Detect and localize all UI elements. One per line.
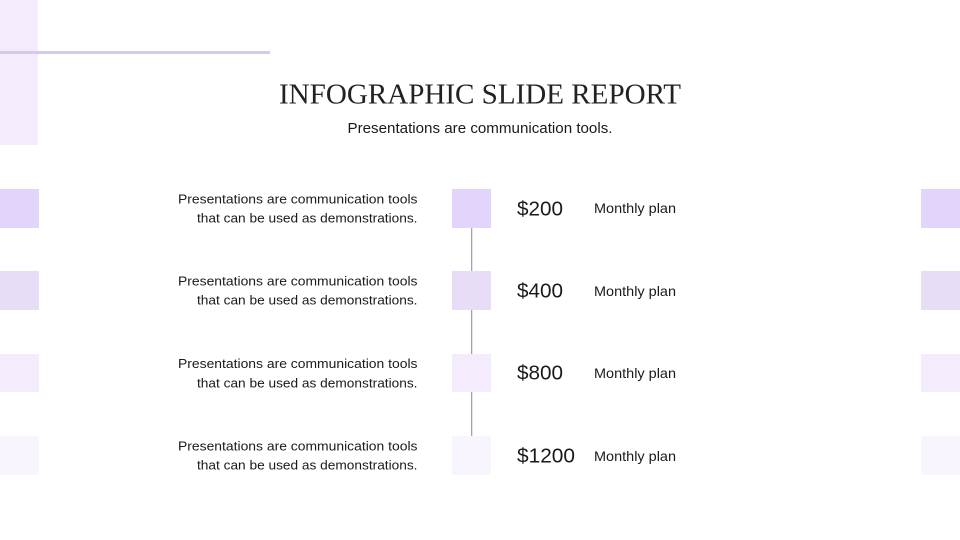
row 1 price: $200 bbox=[517, 198, 563, 220]
row 2 description: that can be used as demonstrations. bbox=[197, 292, 418, 308]
timeline connectors bbox=[471, 228, 472, 436]
row 1 bbox=[178, 189, 676, 228]
row 4 description: that can be used as demonstrations. bbox=[197, 458, 418, 472]
row 4 marker bbox=[452, 436, 491, 475]
row 2 description bbox=[178, 274, 418, 308]
row 4 description bbox=[178, 438, 418, 472]
row 1 marker bbox=[452, 189, 491, 228]
row 1 plan: Monthly plan bbox=[594, 200, 676, 216]
row 2 bbox=[178, 271, 676, 310]
row 1 description: Presentations are communication tools bbox=[178, 192, 418, 206]
top-left accent line bbox=[0, 51, 270, 54]
row 2 description: Presentations are communication tools bbox=[178, 274, 418, 288]
row 1 description: that can be used as demonstrations. bbox=[197, 210, 418, 226]
right edge squares bbox=[921, 189, 960, 475]
row 1 description bbox=[178, 192, 418, 226]
left edge squares bbox=[0, 189, 39, 475]
row 3 price: $800 bbox=[517, 362, 563, 384]
top-left decorative column bbox=[0, 0, 38, 145]
row 2 plan: Monthly plan bbox=[594, 283, 676, 299]
row 3 description bbox=[178, 356, 418, 390]
title: INFOGRAPHIC SLIDE REPORT bbox=[279, 80, 681, 110]
row 4 description: Presentations are communication tools bbox=[178, 438, 418, 454]
row 2 price: $400 bbox=[517, 280, 563, 302]
row 3 plan: Monthly plan bbox=[594, 365, 676, 381]
row 4 bbox=[178, 436, 676, 475]
row 3 description: that can be used as demonstrations. bbox=[197, 376, 418, 390]
row 3 marker bbox=[452, 354, 491, 392]
row 3 description: Presentations are communication tools bbox=[178, 356, 418, 371]
row 4 price: $1200 bbox=[517, 446, 575, 468]
row 2 marker bbox=[452, 271, 491, 310]
row 3 bbox=[178, 354, 676, 392]
row 4 plan: Monthly plan bbox=[594, 448, 676, 464]
subtitle: Presentations are communication tools. bbox=[348, 121, 612, 137]
